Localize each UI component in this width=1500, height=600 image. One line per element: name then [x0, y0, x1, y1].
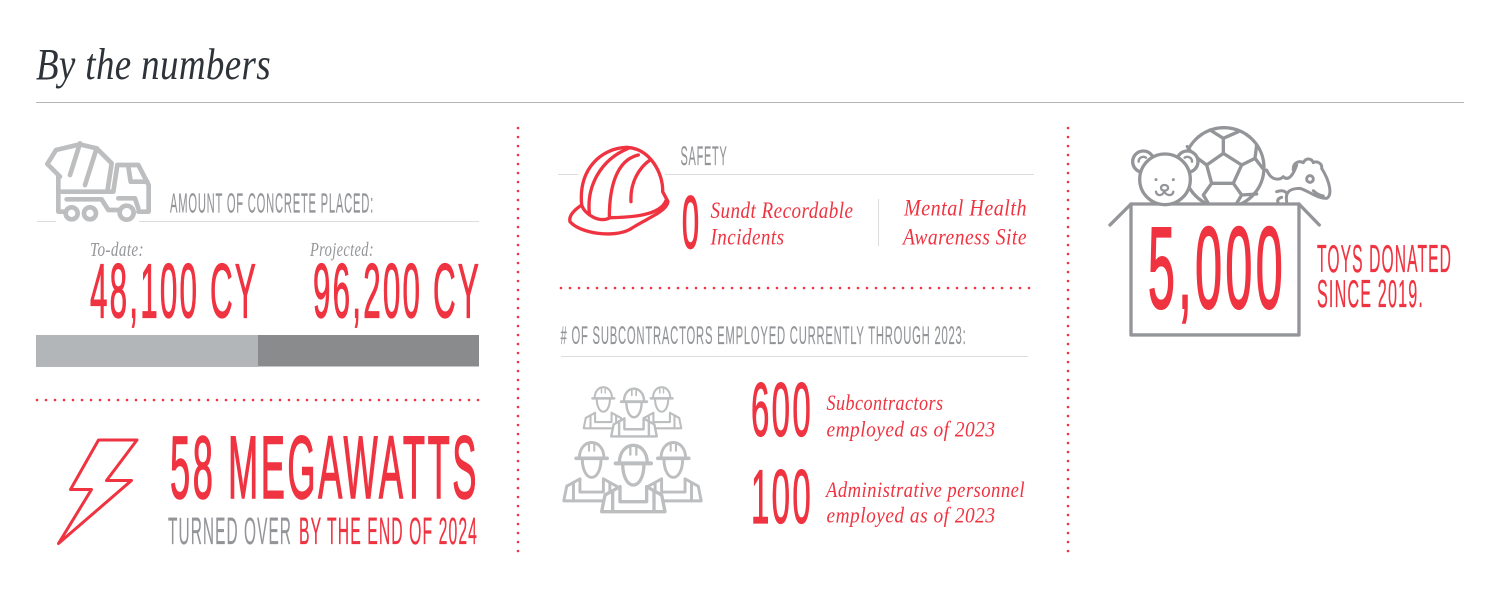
panel: subcontractors	[560, 322, 1028, 540]
label: to-date: To-date:	[90, 239, 144, 261]
text: mental health awareness site	[901, 196, 1027, 250]
panel: safety: 0	[682, 181, 699, 264]
panel: megawatts	[58, 417, 479, 553]
stat: 600 subcontractors: employed as of 2023	[826, 416, 996, 442]
stat: 100 administrative personnel: Administrative personnel	[824, 477, 1025, 502]
panel: safety	[558, 141, 1034, 264]
stat: 100 administrative personnel: 100	[751, 455, 813, 540]
stat: 100 administrative personnel	[751, 455, 1025, 540]
icon: open box	[1110, 204, 1319, 335]
panel: toys donated	[1110, 128, 1452, 335]
icon: hard hat	[570, 147, 668, 234]
text: 58 MEGAWATTS	[170, 417, 479, 517]
icon: lightning bolt	[58, 440, 137, 544]
stat: 600 subcontractors	[751, 368, 996, 453]
icon: concrete mixer truck	[47, 143, 149, 220]
icon: soccer ball	[1184, 128, 1264, 208]
stat: 600 subcontractors: 600	[751, 368, 813, 453]
icon: teddy bear	[1133, 151, 1198, 205]
panel: subcontractors: # OF SUBCONTRACTORS EMPLOYED CURRENTLY THROUGH 2023:	[560, 322, 966, 350]
icon: toy dinosaur	[1267, 159, 1330, 203]
icon: group of workers	[564, 387, 701, 512]
stat: 100 administrative personnel: employed as of 2023	[826, 502, 996, 528]
icon: box of toys	[1110, 128, 1330, 335]
panel: concrete placed	[36, 143, 481, 367]
panel: toys donated: 5,000	[1148, 203, 1286, 333]
label: projected: Projected:	[309, 239, 374, 261]
text: mental health awareness site: Mental Health	[903, 196, 1027, 220]
text: 96,200 CY	[313, 248, 481, 334]
text: mental health awareness site: Awareness Site	[901, 224, 1027, 250]
text: sundt recordable incidents	[710, 198, 854, 250]
caption: toys donated since 2019	[1317, 238, 1452, 316]
panel: concrete placed: 48,100 CY	[90, 248, 258, 334]
caption: turned over by the end of 2024: TURNED OVER	[168, 511, 292, 553]
progress bar	[36, 335, 479, 367]
stat: 600 subcontractors: Subcontractors	[826, 390, 944, 415]
title: By the numbers	[36, 40, 271, 89]
text: BY THE END OF 2024	[299, 511, 478, 553]
panel: safety: SAFETY	[680, 141, 728, 171]
text: sundt recordable incidents: Sundt Recordable	[710, 198, 854, 223]
panel: concrete placed: AMOUNT OF CONCRETE PLACED:	[170, 188, 374, 218]
text: sundt recordable incidents: Incidents	[710, 224, 784, 250]
